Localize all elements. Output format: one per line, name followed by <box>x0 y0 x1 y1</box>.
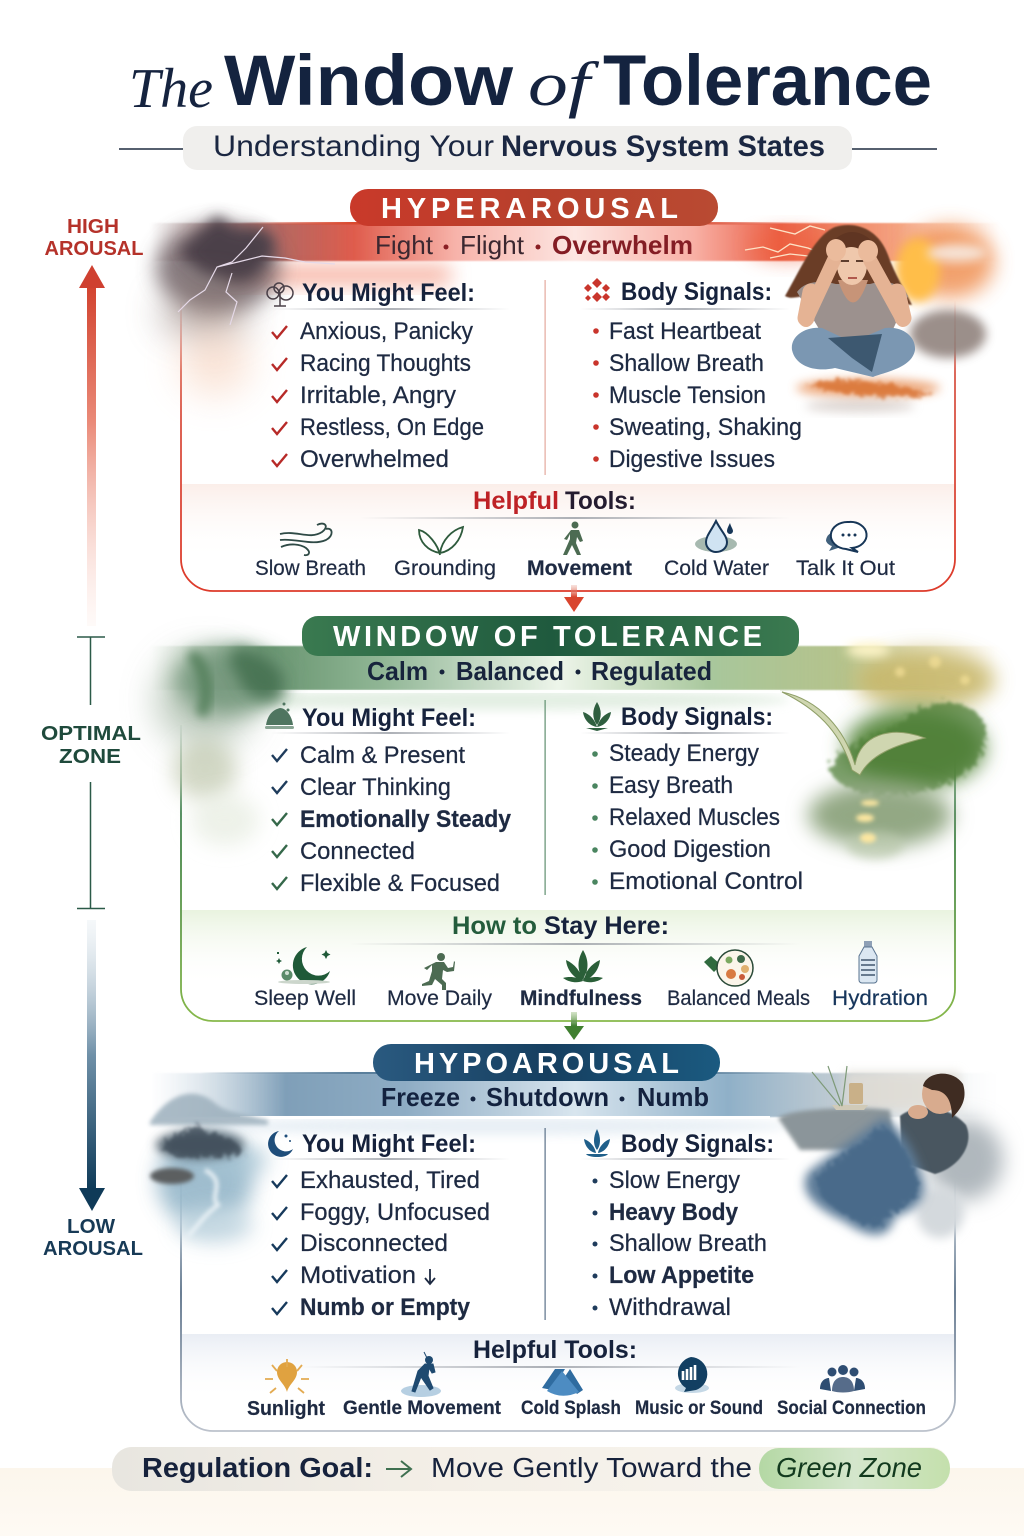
tools strip <box>182 910 954 986</box>
body list: Slow Energy <box>609 1167 740 1194</box>
image: storm clouds and lightning <box>156 224 335 396</box>
descriptors <box>375 230 693 260</box>
feel list <box>272 318 484 473</box>
feel list: Clear Thinking <box>300 774 451 801</box>
feel list: Flexible & Focused <box>300 870 500 897</box>
body list: Sweating, Shaking <box>609 414 802 441</box>
tool: cold splash <box>521 1369 621 1419</box>
title <box>129 42 932 121</box>
feel list: Numb or Empty <box>300 1294 471 1321</box>
tool: hydration: Hydration <box>832 987 928 1010</box>
low arousal label: AROUSAL <box>43 1238 143 1260</box>
column divider <box>544 1128 546 1320</box>
title: The <box>129 58 213 120</box>
pill: hyperarousal <box>350 189 718 226</box>
optimal zone label: ZONE <box>59 746 121 768</box>
arrow icon <box>386 1461 411 1477</box>
tool: cold water: Cold Water <box>664 557 769 580</box>
tool: talk it out <box>796 522 895 580</box>
body list <box>592 1167 767 1321</box>
descriptors: Fight <box>375 230 434 260</box>
how to stay here heading: Stay Here: <box>544 912 669 940</box>
icon: crescent moon <box>268 1131 293 1157</box>
descriptors: Regulated <box>591 656 712 686</box>
heading: You Might Feel: <box>302 279 475 307</box>
panel: hypoarousal <box>150 1044 1003 1431</box>
arms <box>806 260 903 320</box>
regulation goal bar <box>112 1447 950 1491</box>
subtitle pill <box>119 126 937 170</box>
arrow: hyper to window <box>564 585 584 612</box>
column: body signals <box>580 702 803 895</box>
body list: Good Digestion <box>609 836 771 863</box>
body list: Relaxed Muscles <box>609 804 780 831</box>
tool: move daily <box>387 953 492 1010</box>
hair back <box>785 225 912 305</box>
tool: grounding: Grounding <box>394 557 496 580</box>
icon: tree brain <box>267 283 293 306</box>
body list: Withdrawal <box>609 1294 731 1321</box>
downward arrow <box>79 920 105 1211</box>
body list: Emotional Control <box>609 868 803 895</box>
page background wash <box>0 1468 1024 1536</box>
body list: Heavy Body <box>609 1199 739 1226</box>
tool: cold water <box>664 521 769 580</box>
tool: talk it out: Talk It Out <box>796 557 895 580</box>
how to stay here heading: How to <box>452 912 537 940</box>
feel list: Motivation <box>300 1262 416 1289</box>
feel list: Calm & Present <box>300 742 465 769</box>
body list <box>592 740 803 895</box>
descriptors <box>381 1082 709 1112</box>
body list: Easy Breath <box>609 772 733 799</box>
feel list: Emotionally Steady <box>300 806 512 833</box>
pill: hypoarousal: HYPOAROUSAL <box>414 1048 679 1080</box>
helpful tools heading: Helpful <box>473 487 559 515</box>
tool: balanced meals: Balanced Meals <box>667 987 810 1010</box>
tool: sleep well <box>254 947 356 1010</box>
header band <box>150 1072 1000 1135</box>
body list: Shallow Breath <box>609 1230 767 1257</box>
column: you might feel <box>268 1130 510 1321</box>
heading: Body Signals: <box>621 1130 774 1158</box>
helpful tools heading <box>360 487 790 519</box>
optimal zone label: OPTIMAL <box>41 723 141 745</box>
left arousal axis <box>41 216 144 1260</box>
tool: hydration <box>832 941 928 1010</box>
helpful tools heading: Helpful Tools: <box>473 1336 637 1364</box>
green zone pill <box>759 1448 950 1489</box>
goal text: Move Gently Toward the <box>431 1452 752 1483</box>
feel list: Overwhelmed <box>300 446 449 473</box>
tool: grounding <box>394 527 496 580</box>
descriptors: Numb <box>637 1082 709 1112</box>
optimal zone bracket <box>77 637 105 908</box>
card outline <box>181 300 955 591</box>
feel list: Restless, On Edge <box>300 414 484 441</box>
high arousal label: HIGH <box>67 216 119 238</box>
body list: Fast Heartbeat <box>609 318 761 345</box>
pill: window of tolerance: WINDOW OF TOLERANCE <box>333 621 762 653</box>
tool: sunlight: Sunlight <box>247 1398 325 1420</box>
tool: cold splash: Cold Splash <box>521 1398 621 1419</box>
feel list <box>272 742 512 897</box>
pill: window of tolerance <box>302 616 799 656</box>
icon: mound with bubbles <box>265 702 294 729</box>
image: man under blanket on sofa <box>778 1066 1003 1238</box>
image: sprout, moss and water <box>782 643 995 859</box>
image: blurred leaves and stones <box>157 646 288 846</box>
image: overwhelmed woman with fire <box>745 225 994 412</box>
subtitle pill: Understanding Your <box>213 130 494 163</box>
feel list: Foggy, Unfocused <box>300 1199 490 1226</box>
tool: music or sound <box>635 1357 763 1419</box>
tools strip <box>182 1334 954 1400</box>
subtitle pill: Nervous System States <box>501 130 825 163</box>
descriptors: Calm <box>367 656 428 686</box>
column: body signals <box>580 1129 790 1321</box>
descriptors: Balanced <box>456 656 564 686</box>
title: of <box>528 51 600 119</box>
heading: You Might Feel: <box>302 704 476 732</box>
pill: hyperarousal: HYPERAROUSAL <box>381 193 678 225</box>
upward arrow <box>79 265 105 626</box>
feel list <box>272 1167 490 1321</box>
column: you might feel <box>265 702 512 897</box>
body list: Digestive Issues <box>609 446 775 473</box>
heading: You Might Feel: <box>302 1130 476 1158</box>
descriptors: Freeze <box>381 1082 460 1112</box>
helpful tools heading: Tools: <box>565 487 636 515</box>
shirt <box>797 282 908 339</box>
heading: Body Signals: <box>621 703 773 731</box>
body list: Shallow Breath <box>609 350 764 377</box>
column: you might feel <box>267 279 510 473</box>
tool: slow breath: Slow Breath <box>255 557 366 580</box>
body list: Muscle Tension <box>609 382 766 409</box>
feel list: Exhausted, Tired <box>300 1167 480 1194</box>
arrow: window to hypo <box>564 1012 584 1040</box>
title: Tolerance <box>603 42 932 121</box>
feel list: Connected <box>300 838 415 865</box>
card outline <box>181 725 955 1021</box>
tool: mindfulness: Mindfulness <box>520 987 642 1010</box>
descriptors: Shutdown <box>486 1082 609 1112</box>
header band <box>150 646 1000 710</box>
body list: Steady Energy <box>609 740 759 767</box>
tool: social connection: Social Connection <box>777 1398 926 1419</box>
jeans <box>792 328 915 377</box>
tool: sleep well: Sleep Well <box>254 987 356 1010</box>
high arousal label <box>44 216 144 260</box>
heading: Body Signals: <box>621 278 772 306</box>
tool: social connection <box>777 1365 926 1419</box>
tool: music or sound: Music or Sound <box>635 1398 763 1419</box>
tool: sunlight <box>247 1359 325 1420</box>
tools strip <box>182 484 954 560</box>
body list: Low Appetite <box>609 1262 754 1289</box>
image: lake, mountain and rocks <box>150 1094 269 1243</box>
low arousal label: LOW <box>67 1216 115 1238</box>
icon: red diamonds <box>584 278 610 302</box>
high arousal label: AROUSAL <box>44 238 144 260</box>
card outline <box>181 1180 955 1431</box>
body list <box>593 318 802 473</box>
header band <box>150 222 1000 284</box>
optimal zone label <box>41 723 141 768</box>
pill: hypoarousal <box>373 1044 720 1081</box>
green zone pill: Green Zone <box>776 1452 922 1483</box>
low arousal label <box>43 1216 143 1260</box>
column divider <box>544 280 546 475</box>
feel list: Anxious, Panicky <box>300 318 473 345</box>
descriptors <box>367 656 712 686</box>
column divider <box>544 700 546 895</box>
panel: hyperarousal <box>150 189 1000 591</box>
face <box>837 245 867 285</box>
goal label: Regulation Goal: <box>142 1452 373 1483</box>
tool: gentle movement: Gentle Movement <box>343 1398 502 1419</box>
how to stay here heading <box>350 912 800 945</box>
tool: balanced meals <box>667 950 810 1010</box>
panel: window of tolerance <box>150 616 1000 1021</box>
icon: blue lotus <box>584 1129 610 1157</box>
tool: move daily: Move Daily <box>387 987 492 1010</box>
feel list: Irritable, Angry <box>300 382 456 409</box>
feel list: Racing Thoughts <box>300 350 471 377</box>
icon: lotus leaf <box>583 702 611 731</box>
tool: movement <box>527 522 632 580</box>
tool: gentle movement <box>343 1352 502 1419</box>
tool: slow breath <box>255 524 366 580</box>
feel list: Disconnected <box>300 1230 448 1257</box>
tool: movement: Movement <box>527 557 632 580</box>
column: body signals <box>580 278 802 473</box>
descriptors: Flight <box>460 230 525 260</box>
descriptors: Overwhelm <box>552 230 693 260</box>
title: Window <box>224 42 514 121</box>
tool: mindfulness <box>520 950 642 1010</box>
